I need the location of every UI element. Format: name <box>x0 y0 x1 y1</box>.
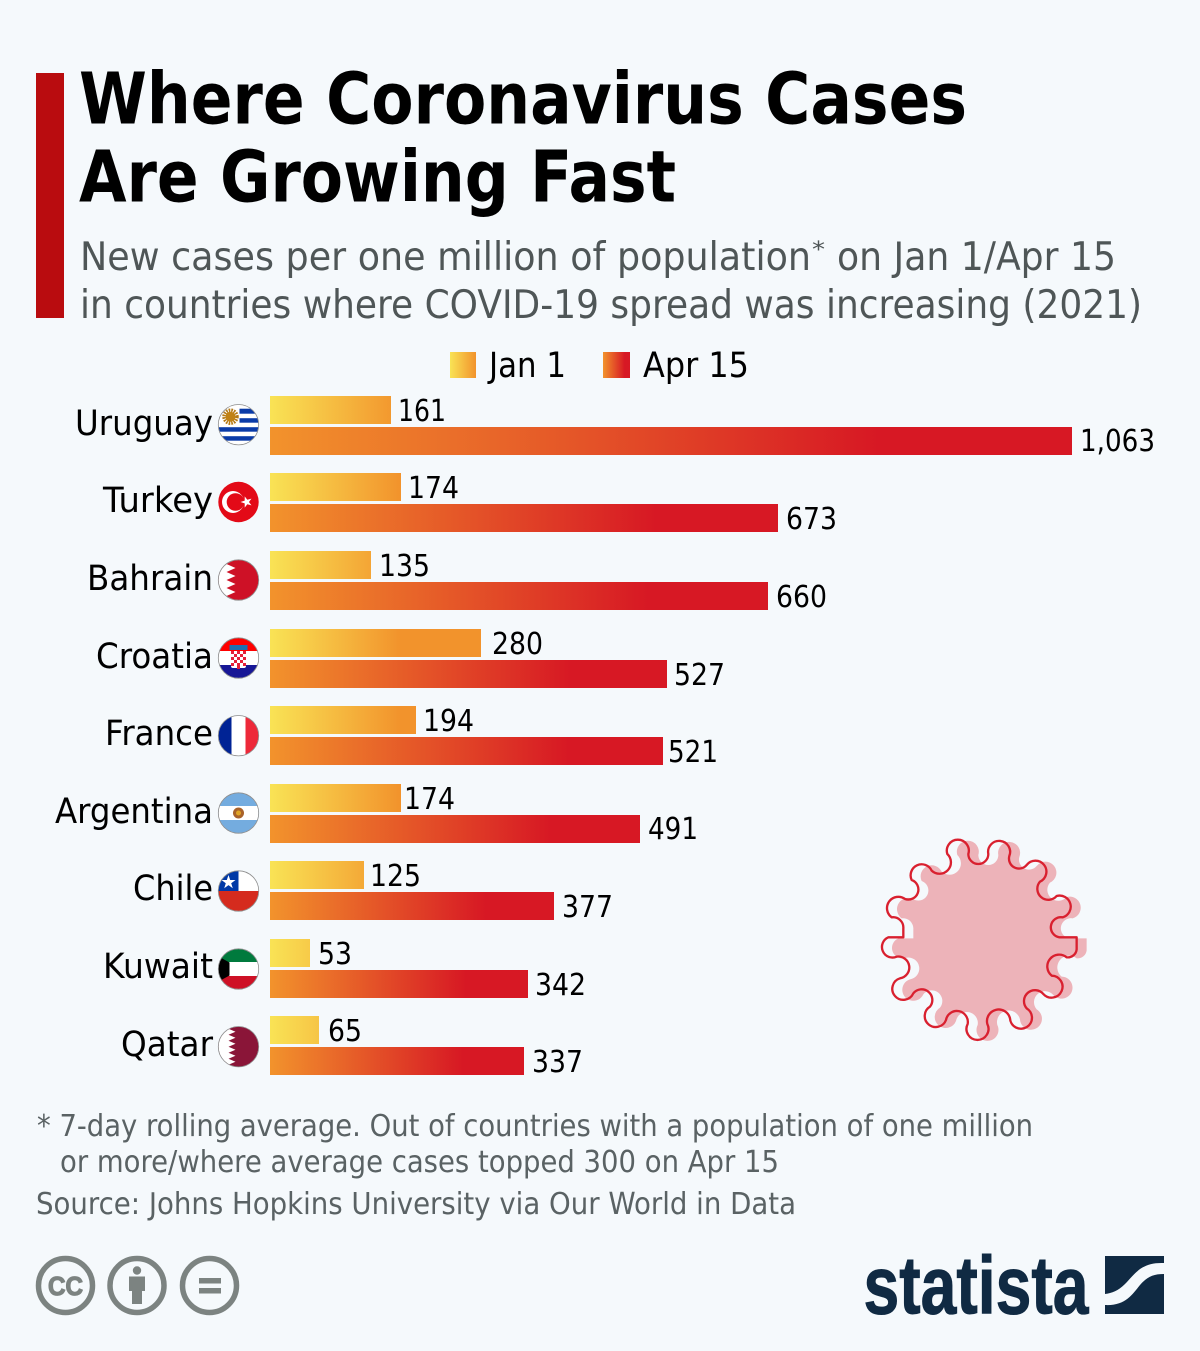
row: Turkey: Turkey <box>102 481 213 521</box>
bar: Chile Apr 15 <box>270 892 554 920</box>
legend <box>450 346 749 386</box>
bar: Uruguay Apr 15 <box>270 427 1072 455</box>
row: Bahrain: Bahrain <box>87 559 213 599</box>
footnote: * 7-day rolling average. Out of countries with a population of one million <box>37 1109 1033 1144</box>
value: Chile Apr 15: 377 <box>562 890 613 925</box>
bar: France Apr 15 <box>270 737 663 765</box>
title <box>79 58 967 218</box>
row: Kuwait <box>106 939 584 998</box>
value: Turkey Apr 15: 673 <box>786 502 837 537</box>
icon: no derivatives <box>182 1258 236 1312</box>
bar: Kuwait Apr 15 <box>270 970 528 998</box>
legend: Apr 15 <box>643 346 749 386</box>
value: France Jan 1: 194 <box>423 704 474 739</box>
bar: Croatia Jan 1 <box>270 629 481 657</box>
value: Qatar Jan 1: 65 <box>328 1014 362 1049</box>
row: Qatar: Qatar <box>121 1025 214 1065</box>
value: Kuwait Jan 1: 53 <box>318 937 352 972</box>
subtitle: New cases per one million of population <box>80 235 811 280</box>
bar: Turkey Jan 1 <box>270 473 401 501</box>
bar: Qatar Jan 1 <box>270 1016 319 1044</box>
icon: flag of Turkey <box>218 482 259 522</box>
value: Kuwait Apr 15: 342 <box>535 968 586 1003</box>
source: Source: Johns Hopkins University via Our World in Data <box>36 1187 796 1222</box>
value: Croatia Apr 15: 527 <box>674 658 725 693</box>
row: Chile <box>134 861 611 920</box>
accent bar <box>36 73 64 318</box>
row: Argentina <box>55 782 698 847</box>
bar: Bahrain Apr 15 <box>270 582 768 610</box>
footnote <box>37 1109 1033 1180</box>
bar: Kuwait Jan 1 <box>270 939 310 967</box>
bar: Croatia Apr 15 <box>270 660 667 688</box>
row: Uruguay: Uruguay <box>75 404 213 444</box>
value: Uruguay Jan 1: 161 <box>398 394 446 429</box>
value: Qatar Apr 15: 337 <box>532 1045 583 1080</box>
row: Kuwait: Kuwait <box>103 947 213 987</box>
value: Bahrain Apr 15: 660 <box>776 580 827 615</box>
title: Are Growing Fast <box>79 136 676 218</box>
icon: flag of Argentina <box>218 792 260 834</box>
value: France Apr 15: 521 <box>668 735 718 770</box>
subtitle: on Jan 1/Apr 15 <box>837 235 1116 280</box>
row: Bahrain <box>90 551 826 610</box>
subtitle <box>80 235 1142 328</box>
value: Argentina Apr 15: 491 <box>648 812 698 847</box>
row: Croatia: Croatia <box>96 637 213 677</box>
row: Argentina: Argentina <box>55 792 213 832</box>
icon: attribution <box>110 1258 164 1312</box>
footnote: or more/where average cases topped 300 on Apr 15 <box>60 1145 779 1180</box>
icon: flag of Croatia <box>218 637 260 679</box>
bar: Bahrain Jan 1 <box>270 551 371 579</box>
logo: Statista: statista <box>864 1240 1090 1332</box>
icon: CC license: CC <box>48 1271 83 1301</box>
subtitle: * <box>812 238 825 263</box>
row: Uruguay <box>75 394 1155 459</box>
value: Uruguay Apr 15: 1,063 <box>1080 424 1155 459</box>
row: France: France <box>105 714 213 754</box>
icon: flag of Uruguay <box>218 404 260 446</box>
bar: Argentina Apr 15 <box>270 815 640 843</box>
row: Turkey <box>102 471 837 537</box>
bar: Chile Jan 1 <box>270 861 364 889</box>
bar: Uruguay Jan 1 <box>270 396 391 424</box>
icon: flag of Qatar <box>218 1026 260 1068</box>
value: Chile Jan 1: 125 <box>370 859 421 894</box>
value: Croatia Jan 1: 280 <box>492 627 543 662</box>
bar: France Jan 1 <box>270 706 416 734</box>
bar: Qatar Apr 15 <box>270 1047 524 1075</box>
icon: flag of Chile <box>218 870 260 912</box>
row: Croatia <box>98 629 723 688</box>
value: Turkey Jan 1: 174 <box>408 471 459 506</box>
icon: flag of France <box>218 715 260 757</box>
value: Argentina Jan 1: 174 <box>404 782 455 817</box>
row: Qatar <box>122 1016 581 1075</box>
icon: CC license <box>38 1258 92 1312</box>
icon: flag of Kuwait <box>218 948 260 990</box>
row: Chile: Chile <box>133 869 213 909</box>
legend: Jan 1 <box>487 346 566 386</box>
subtitle: in countries where COVID-19 spread was increasing (2021) <box>80 283 1142 328</box>
bar: Argentina Jan 1 <box>270 784 401 812</box>
icon: coronavirus <box>882 840 1087 1041</box>
bar: Turkey Apr 15 <box>270 504 778 532</box>
icon: flag of Bahrain <box>218 559 260 601</box>
title: Where Coronavirus Cases <box>79 58 967 140</box>
value: Bahrain Jan 1: 135 <box>379 549 430 584</box>
row: France <box>108 706 716 765</box>
